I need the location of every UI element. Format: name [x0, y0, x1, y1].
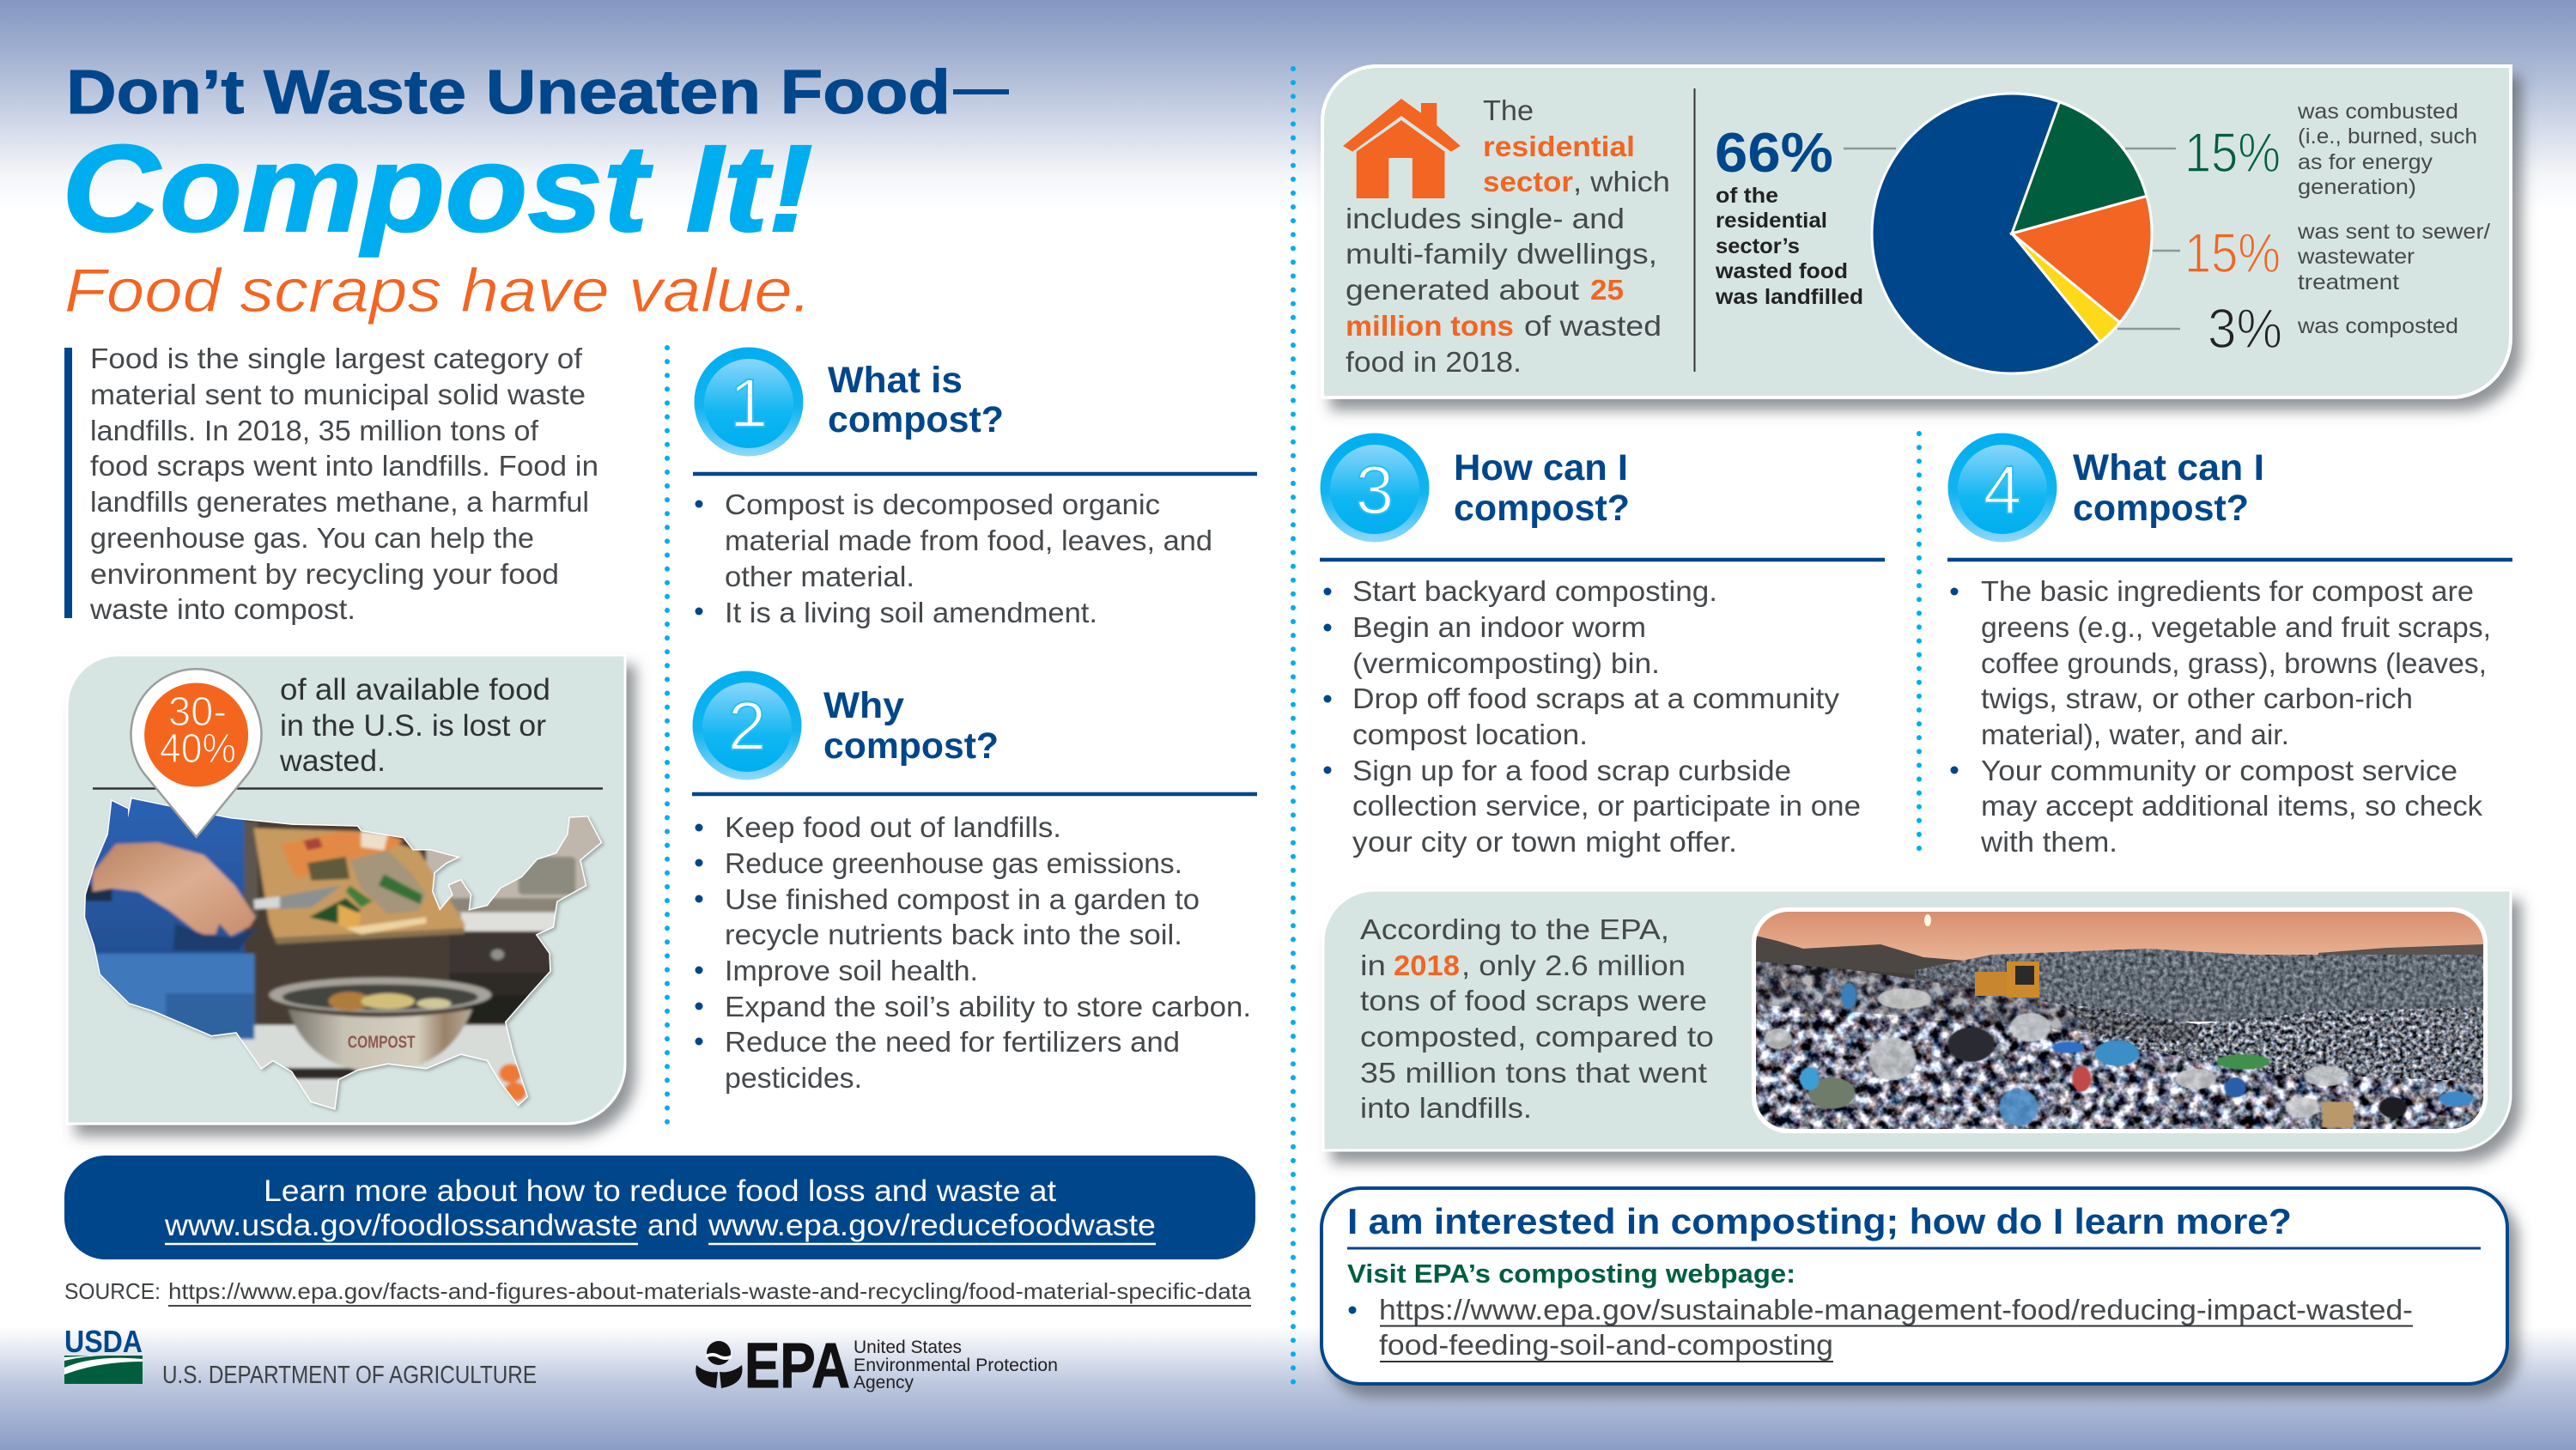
- 66% stat: 66%: [1715, 121, 1833, 184]
- panel: learn more about composting: [1321, 1188, 2507, 1384]
- legend: sewer 15%: 15%: [2184, 221, 2281, 284]
- legend: combusted 15%: 15%: [2184, 121, 2281, 184]
- section 2 bullets: Reduce greenhouse gas emissions.: [725, 847, 1182, 879]
- intro text block: greenhouse gas. You can help the: [90, 522, 534, 554]
- intro text block: Food is the single largest category of: [90, 343, 583, 374]
- legend: sewer 15%: treatment: [2298, 270, 2399, 294]
- EPA composting link: https://www.epa.gov/sustainable-management-food/reducing-impact-wasted-: [1379, 1294, 2413, 1326]
- section 3 bullets: your city or town might offer.: [1352, 826, 1737, 858]
- number badge 4: [1947, 433, 2057, 543]
- legend: sewer 15%: [2184, 220, 2490, 294]
- panel: landfill statistic: [1323, 890, 2511, 1150]
- legend: sewer 15%: was sent to sewer/: [2297, 220, 2490, 244]
- number badge 3: [1321, 433, 1429, 543]
- subheading: Visit EPA’s composting webpage:: [1347, 1259, 1795, 1289]
- intro text block: material sent to municipal solid waste: [90, 379, 586, 410]
- section 4 bullets: coffee grounds, grass), browns (leaves,: [1981, 647, 2487, 679]
- location pin callout: 30-40%: 30-: [168, 689, 227, 735]
- stat caption: in the U.S. is lost or: [280, 709, 546, 743]
- USDA logo: U.S. DEPARTMENT OF AGRICULTURE: [162, 1362, 537, 1389]
- section 4 bullets: may accept additional items, so check: [1981, 790, 2483, 822]
- 66% stat: of the: [1716, 184, 1778, 208]
- landfill photo: [1752, 907, 2488, 1133]
- intro text block: landfills. In 2018, 35 million tons of: [90, 415, 539, 446]
- stat caption: [279, 673, 550, 778]
- section 1 bullets: [696, 488, 1212, 628]
- section 4 bullets: The basic ingredients for compost are: [1981, 575, 2474, 607]
- section 2 heading: [823, 685, 999, 767]
- section 3 heading: [1454, 447, 1630, 529]
- section 4 bullets: Your community or compost service: [1981, 755, 2458, 786]
- section 1 heading: What is: [828, 360, 963, 401]
- residential sector text: includes single- and: [1346, 203, 1625, 234]
- section 3 bullets: collection service, or participate in one: [1352, 790, 1861, 822]
- icon: house: [1343, 99, 1461, 198]
- section 4 bullets: with them.: [1980, 826, 2117, 858]
- residential sector text: , which: [1573, 166, 1670, 197]
- 66% stat: sector’s: [1716, 234, 1800, 258]
- section 2 bullets: Keep food out of landfills.: [725, 811, 1061, 843]
- learn more banner: [64, 1156, 1255, 1259]
- EPA composting link: food-feeding-soil-and-composting: [1379, 1329, 1833, 1361]
- section 3 heading: compost?: [1454, 488, 1630, 529]
- residential sector text: food in 2018.: [1346, 346, 1522, 378]
- section 3 bullets: Drop off food scraps at a community: [1352, 683, 1840, 714]
- EPA logo: [696, 1330, 1058, 1401]
- number badge 1: 1: [730, 365, 768, 441]
- subtitle: Food scraps have value.: [64, 258, 811, 325]
- heading: Don't Waste Uneaten Food: Don’t Waste Uneaten Food: [66, 58, 951, 127]
- landfill text: According to the EPA,: [1360, 913, 1669, 945]
- intro text block: waste into compost.: [89, 593, 355, 625]
- section 4 bullets: twigs, straw, or other carbon-rich: [1981, 683, 2413, 714]
- section 4 heading: What can I: [2073, 447, 2264, 488]
- learn more banner: and: [647, 1209, 698, 1242]
- location pin callout: 30-40%: 40%: [160, 726, 236, 772]
- section 4: What can I compost?: [1947, 433, 2512, 858]
- source line: SOURCE:: [64, 1278, 161, 1304]
- landfill text: composted, compared to: [1360, 1021, 1714, 1053]
- legend: combusted 15%: [2184, 100, 2477, 199]
- 66% stat: was landfilled: [1715, 285, 1863, 309]
- section 1 bullets: other material.: [725, 561, 914, 592]
- section 2: Why compost?: [692, 671, 1257, 1094]
- location pin callout: 30-40%: [131, 669, 261, 837]
- residential sector text: multi-family dwellings,: [1346, 238, 1657, 270]
- section 3 bullets: [1324, 575, 1861, 858]
- source line: https://www.epa.gov/facts-and-figures-about-materials-waste-and-recycling/food-material-specific-data: [168, 1278, 1252, 1304]
- EPA composting link: [1348, 1294, 2413, 1362]
- landfill text: 35 million tons that went: [1360, 1057, 1707, 1089]
- stat caption: of all available food: [280, 673, 550, 707]
- legend: combusted 15%: (i.e., burned, such: [2298, 124, 2477, 149]
- 66% stat: [1715, 121, 1863, 309]
- legend: sewer 15%: wastewater: [2297, 245, 2415, 269]
- section 3: How can I compost?: [1320, 433, 1885, 858]
- section 1 heading: [828, 360, 1004, 440]
- heading dash: [953, 89, 1009, 94]
- number badge 3: 3: [1356, 452, 1394, 528]
- section 2 heading: compost?: [823, 725, 999, 767]
- landfill text: tons of food scraps were: [1360, 985, 1707, 1016]
- legend: combusted 15%: generation): [2298, 175, 2416, 199]
- learn more banner: Learn more about how to reduce food loss and waste at: [264, 1174, 1056, 1208]
- residential sector text: of wasted: [1524, 310, 1662, 342]
- residential sector text: residential: [1483, 130, 1635, 162]
- legend: combusted 15%: was combusted: [2297, 100, 2458, 124]
- section 4 heading: [2073, 447, 2264, 529]
- residential sector text: 25: [1590, 274, 1624, 306]
- bulldozer: [1975, 962, 2039, 998]
- landfill text: [1360, 913, 1714, 1124]
- section 4 bullets: [1951, 575, 2491, 858]
- USDA logo: [64, 1324, 537, 1389]
- residential sector text: million tons: [1346, 310, 1514, 342]
- intro text block: environment by recycling your food: [90, 558, 559, 590]
- section 1 bullets: Compost is decomposed organic: [725, 488, 1160, 520]
- number badge 2: 2: [728, 688, 766, 764]
- learn more banner: www.epa.gov/reducefoodwaste: [708, 1209, 1156, 1242]
- EPA logo: Agency: [854, 1373, 914, 1392]
- section 2 bullets: [696, 811, 1251, 1094]
- number badge 2: [692, 671, 802, 780]
- intro text block: landfills generates methane, a harmful: [90, 486, 589, 518]
- panel: food lost and wasted map: [67, 655, 625, 1124]
- intro text block: food scraps went into landfills. Food in: [90, 450, 598, 482]
- section 2 bullets: Reduce the need for fertilizers and: [725, 1026, 1180, 1058]
- number badge 4: 4: [1984, 452, 2021, 528]
- EPA logo: Environmental Protection: [854, 1356, 1058, 1375]
- residential sector text: [1346, 94, 1670, 378]
- landfill text: 2018: [1394, 949, 1460, 981]
- EPA logo: United States: [854, 1338, 962, 1357]
- bowl label: COMPOST: [348, 1033, 415, 1053]
- landfill text: , only 2.6 million: [1461, 949, 1686, 981]
- legend: composted 3%: was composted: [2297, 314, 2458, 338]
- stat caption: wasted.: [279, 744, 386, 778]
- residential sector text: generated about: [1346, 274, 1579, 306]
- section 2 bullets: Use finished compost in a garden to: [725, 883, 1200, 915]
- EPA logo: EPA: [744, 1330, 850, 1401]
- section 4 bullets: material), water, and air.: [1981, 719, 2289, 750]
- 66% stat: residential: [1716, 209, 1827, 233]
- section 3 heading: How can I: [1454, 447, 1628, 488]
- section 3 bullets: Sign up for a food scrap curbside: [1352, 755, 1791, 786]
- legend: combusted 15%: as for energy: [2298, 150, 2433, 174]
- panel: residential sector: [1322, 66, 2511, 397]
- legend: composted 3%: 3%: [2208, 297, 2282, 360]
- residential sector text: sector: [1483, 166, 1573, 197]
- number badge 1: [694, 347, 804, 457]
- section 4 heading: compost?: [2073, 488, 2249, 529]
- section 2 heading: Why: [823, 685, 904, 726]
- pie chart: [1872, 94, 2152, 373]
- section 3 bullets: Begin an indoor worm: [1352, 611, 1646, 643]
- section 2 bullets: Improve soil health.: [725, 955, 978, 986]
- section 2 bullets: Expand the soil’s ability to store carbon.: [725, 991, 1251, 1022]
- section 1: What is compost?: [693, 347, 1257, 628]
- intro text block: [64, 343, 598, 625]
- section 2 bullets: pesticides.: [725, 1062, 862, 1094]
- section 4 bullets: greens (e.g., vegetable and fruit scraps,: [1981, 611, 2491, 643]
- section 1 bullets: material made from food, leaves, and: [725, 525, 1212, 556]
- section 1 heading: compost?: [828, 399, 1004, 440]
- section 3 bullets: compost location.: [1352, 719, 1588, 750]
- section 1 bullets: It is a living soil amendment.: [725, 597, 1097, 628]
- section 3 bullets: Start backyard composting.: [1352, 575, 1717, 607]
- learn more banner: www.usda.gov/foodlossandwaste: [164, 1209, 638, 1242]
- landfill text: into landfills.: [1360, 1092, 1532, 1124]
- legend: composted 3%: [2208, 297, 2458, 360]
- heading: Compost It!: Compost It!: [62, 119, 813, 258]
- US map with kitchen photo: [82, 797, 606, 1120]
- section 3 bullets: (vermicomposting) bin.: [1352, 647, 1660, 679]
- landfill text: in: [1360, 949, 1386, 981]
- USDA logo: USDA: [64, 1324, 143, 1359]
- learn more heading: I am interested in composting; how do I learn more?: [1347, 1201, 2292, 1241]
- title: [62, 58, 1009, 325]
- section 2 bullets: recycle nutrients back into the soil.: [725, 919, 1182, 950]
- residential sector text: The: [1483, 94, 1534, 126]
- 66% stat: wasted food: [1715, 259, 1848, 283]
